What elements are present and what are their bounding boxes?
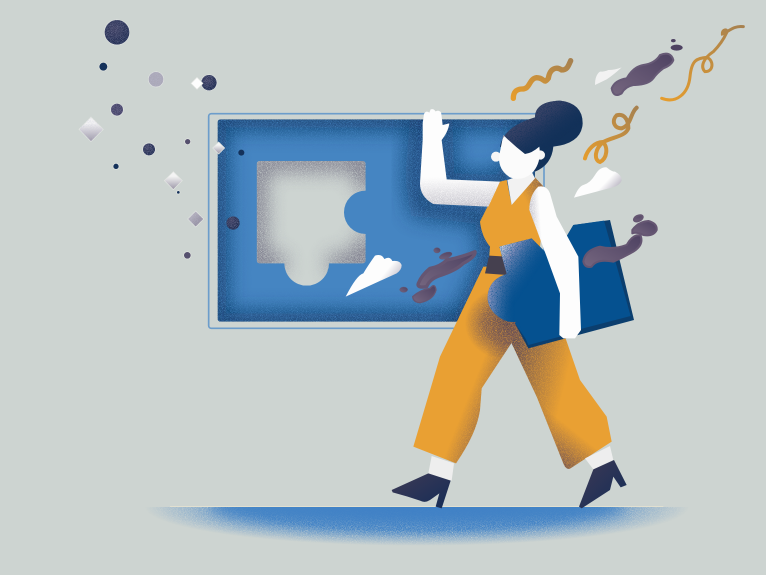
ground shadow: [152, 506, 683, 545]
squiggles, blob and cloud top right: [513, 26, 743, 198]
panel: picture frame with puzzle cut-out: [209, 114, 544, 335]
cloud near hair: [574, 167, 622, 198]
small blob drops: [671, 39, 683, 51]
hair back: [500, 101, 583, 172]
rear shoe: [579, 460, 627, 508]
front sock: [428, 456, 454, 481]
puzzle hole: [257, 161, 367, 288]
dark dot in panel: [238, 150, 244, 156]
figure: woman walking: [392, 101, 657, 508]
orange long curl: [662, 26, 743, 100]
dark ball in panel: [226, 216, 240, 230]
right arm: [529, 186, 581, 338]
folder back face: [515, 221, 631, 343]
rear leg: [512, 310, 612, 469]
face: [499, 135, 540, 179]
front leg: [413, 266, 520, 464]
top right smoke blob: [612, 54, 673, 95]
blue inner panel: [218, 115, 535, 335]
orange wave: [513, 61, 571, 98]
illustration: [78, 20, 745, 545]
frame outline: [209, 114, 544, 328]
particles: balls and diamonds: [79, 20, 225, 259]
smoke blob on folder: [583, 214, 657, 267]
cloud in panel: [346, 255, 402, 297]
small cloud: [595, 67, 622, 85]
raised arm: [420, 109, 500, 207]
neck: [507, 172, 535, 205]
front shoe: [392, 473, 451, 508]
back of folder: [515, 220, 634, 348]
upper body: [420, 101, 657, 348]
socks and shoes: [392, 446, 627, 508]
smoke blobs in panel: [400, 248, 475, 303]
rear sock: [585, 446, 613, 469]
hair highlight: [500, 101, 583, 154]
orange curl middle: [585, 108, 637, 162]
dress bodice: [480, 177, 547, 257]
folder front puzzle piece: [488, 238, 560, 345]
dark belt: [485, 255, 507, 275]
ears: [491, 150, 545, 162]
